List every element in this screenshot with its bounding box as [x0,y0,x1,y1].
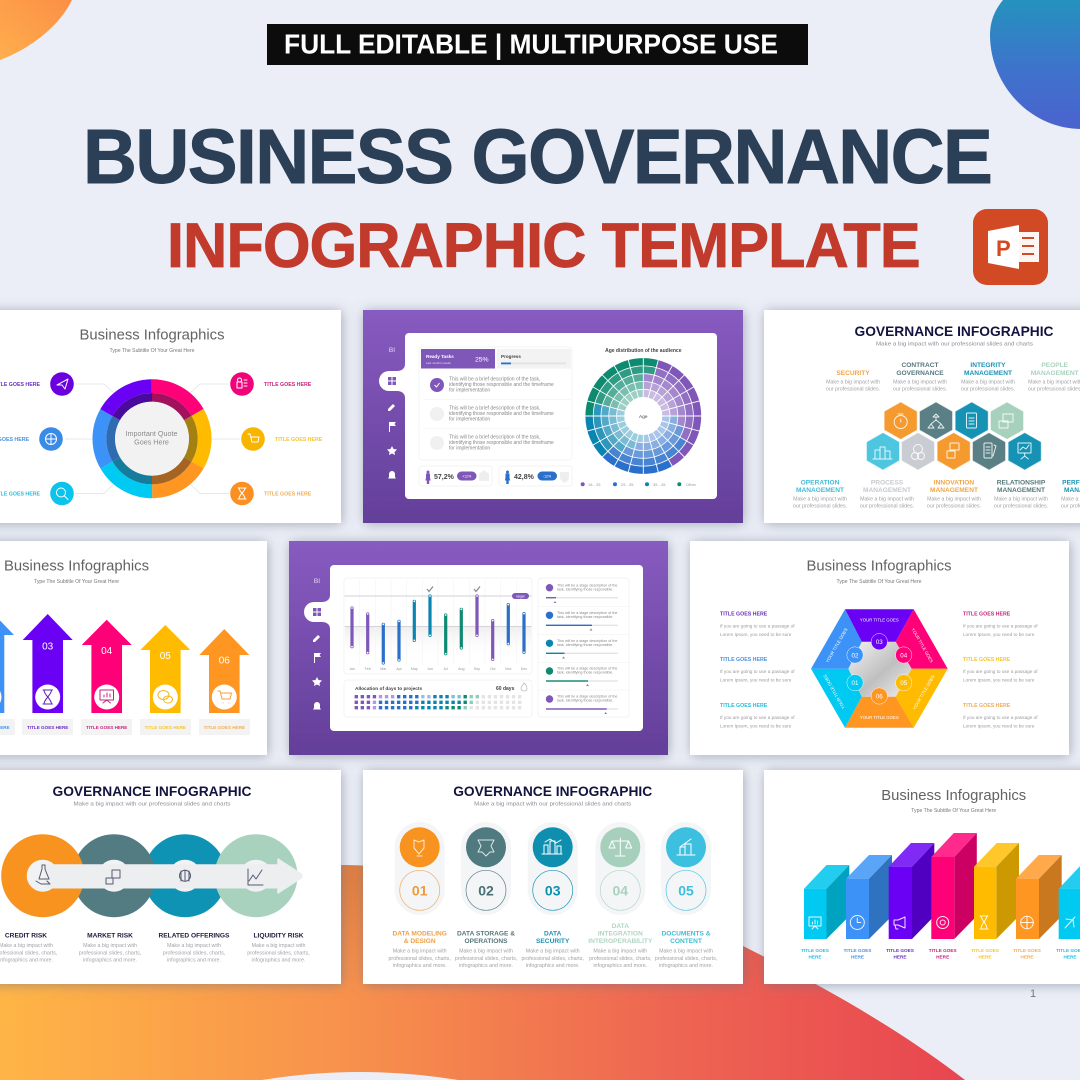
range chart card: Dec [521,667,527,671]
pill 01 [395,822,445,915]
bar labels: HERE [893,954,907,960]
panel: purple dashboard with age wheel [363,310,743,523]
left text blocks: If you are going to use a passage of [720,669,795,674]
3D bar chart [804,833,1080,939]
decoration: orange-red bottom wave [0,865,965,1080]
hexagon diagram: YOUR TITLE GOES [910,627,934,663]
right text blocks: Lorem Ipsum, you need to be sure [963,678,1035,682]
right text blocks: If you are going to use a passage of [963,624,1038,628]
top labels: CONTRACT [902,362,938,369]
chart legend: 25 - 35 [621,482,634,487]
hexagon diagram: 03 [876,639,883,646]
panel: 3D bars [764,770,1080,984]
hexagon diagram: YOUR TITLE GOES [822,674,846,710]
hexagon diagram: YOUR TITLE GOES [912,674,936,710]
pill descriptions: infographics and more. [393,963,447,969]
stage list card: This will be a stage description of the [557,695,617,699]
panel: purple dashboard with range chart [289,541,668,755]
risk descriptions: professional slides, charts, [79,950,141,956]
task list card: for implementation [449,446,490,452]
range chart card: target [516,594,525,598]
top labels: Make a big impact with [961,380,1015,386]
panel: arrows infographic [0,541,267,755]
task list card: Progress [501,354,521,359]
pill descriptions: Make a big impact with [659,948,713,954]
risk descriptions: infographics and more. [252,958,305,964]
banner [267,24,808,65]
task list card: for implementation [449,388,490,394]
arrow 03 [22,614,73,735]
task list card: Ready Tasks [426,354,454,359]
bottom labels: Make a big impact with [927,496,981,502]
left text blocks: Lorem Ipsum, you need to be sure [720,724,792,728]
bar labels: TITLE GOES [1013,948,1041,953]
hexagon diagram: 04 [900,652,908,659]
pill labels: CONTENT [670,938,702,945]
right text blocks: TITLE GOES HERE [963,612,1011,618]
pill descriptions: infographics and more. [659,963,713,969]
stage list card: task, identifying those responsible. [557,671,613,675]
connector lines [65,384,240,494]
center quote: Important Quote [126,429,177,438]
hexagon diagram: YOUR TITLE GOES [860,715,899,720]
heading: GOVERNANCE INFOGRAPHIC [52,783,252,799]
task list card: Last month's results [426,361,451,365]
bar labels: HERE [808,954,822,960]
bar labels: TITLE GOES [971,948,999,953]
pill 01: 01 [412,882,428,898]
hexagon diagram: YOUR TITLE GOES [860,618,899,622]
pill descriptions: Make a big impact with [526,948,580,954]
hexagon diagram [811,609,948,728]
pill labels: DATA [544,930,562,938]
center quote: Goes Here [134,438,169,446]
left text blocks: If you are going to use a passage of [720,715,795,720]
top labels: Make a big impact with [826,380,880,386]
sidebar: BI [389,347,395,354]
risk descriptions [0,943,310,964]
risk titles: RELATED OFFERINGS [159,932,230,940]
range chart card: Jul [443,667,448,671]
stage list card: This will be a stage description of the [557,667,617,671]
stat: 42,8% [499,466,572,486]
range chart card: Jun [427,667,433,671]
right text blocks: Lorem Ipsum, you need to be sure [963,724,1035,728]
stage list card: task, identifying those responsible. [557,643,613,647]
heading: Business Infographics [881,787,1026,804]
top labels: our professional slides. [826,386,880,392]
arrow 06: 06 [219,656,230,666]
arrow 02 [0,609,15,735]
labels: TITLE GOES HERE [264,491,312,497]
top labels: PEOPLE [1041,362,1069,369]
left text blocks: Lorem Ipsum, you need to be sure [720,632,792,637]
arrow 05: TITLE GOES HERE [145,725,186,730]
task list card: identifying those responsible and the timeframe [449,411,554,417]
decoration: blue blurred circle [990,0,1080,129]
range chart card: Jan [349,667,355,671]
risk descriptions: Make a big impact with [167,943,221,949]
pill labels: SECURITY [536,938,570,945]
risk descriptions: infographics and more. [167,958,221,964]
overlapping rings [1,834,297,917]
allocation card [344,680,532,717]
bar labels: HERE [1020,954,1034,960]
stat: 57,2% [419,466,492,486]
right text blocks: Lorem Ipsum, you need to be sure [963,632,1035,637]
range chart card: Nov [505,667,512,671]
arrow 04: TITLE GOES HERE [86,725,127,730]
chart legend: Other [686,482,697,487]
subheading: Make a big impact with our professional slides and charts [876,342,1033,348]
subheading: Type The Subtitle Of Your Great Here [110,348,195,354]
range chart card: Feb [365,667,371,671]
range chart card: Aug [458,667,465,671]
panel: donut infographic [0,310,341,523]
left text blocks: TITLE GOES HERE [720,657,768,663]
stage list card [538,578,629,717]
bar labels: HERE [936,954,949,960]
pill labels: DOCUMENTS & [661,930,711,938]
arrow 03: 03 [42,642,54,652]
risk titles: LIQUIDITY RISK [253,932,304,940]
risk descriptions: professional slides, charts, [247,950,310,956]
labels [0,382,323,497]
sidebar [379,347,405,478]
pill labels: INTEGRATION [598,930,643,938]
task list card: This will be a brief description of the task, [449,434,540,440]
right text blocks: If you are going to use a passage of [963,715,1038,720]
icon circles [39,372,265,505]
range chart card: Apr [396,667,403,671]
risk icons [36,865,263,885]
pill 03: 03 [545,882,561,898]
labels: TITLE GOES HERE [275,437,323,443]
arrow 05 [140,625,191,735]
top labels: our professional slides. [961,386,1015,392]
bottom labels: INNOVATION [934,480,974,486]
pill descriptions: Make a big impact with [459,948,513,954]
pill 04: 04 [613,882,628,898]
pill descriptions: infographics and more. [459,963,513,969]
stat: 42,8%: 42,8% [514,474,535,481]
pill 03 [528,822,578,915]
labels: TITLE GOES HERE [264,382,312,388]
task list card: identifying those responsible and the timeframe [449,382,554,388]
pill labels: & DESIGN [404,938,436,945]
task list card: for implementation [449,416,490,422]
hexagon diagram: 05 [900,680,908,687]
pill 02 [461,822,511,915]
hexagon diagram: 02 [852,652,859,659]
pill labels: DATA MODELING [392,930,447,938]
stat: 42,8%: -12% [543,474,551,478]
decoration: orange corner shape [0,0,72,60]
bottom labels: MANAGEMENT [796,487,844,494]
banner: FULL EDITABLE | MULTIPURPOSE USE [284,29,778,60]
donut chart [99,386,205,491]
stage list card: This will be a stage description of the [557,611,617,615]
stage list card: This will be a stage description of the [557,639,617,643]
bottom labels: our professional slides. [860,504,914,510]
range chart card: Oct [490,667,495,671]
hexagon diagram: 01 [852,680,859,687]
task list card: This will be a brief description of the task, [449,406,540,412]
stat: 57,2%: +12% [462,474,471,478]
subheading: Type The Subtitle Of Your Great Here [836,579,922,585]
pill descriptions: professional slides, charts, [521,956,584,962]
bottom labels: RELATIONSHIP [997,480,1046,486]
risk descriptions: Make a big impact with [83,943,137,949]
range chart card: May [411,667,418,671]
hexagon diagram: 06 [876,693,883,700]
top labels: MANAGEMENT [964,370,1012,377]
pill descriptions: professional slides, charts, [455,956,517,962]
sidebar [304,578,330,710]
top labels [826,362,1080,392]
pill descriptions: professional slides, charts, [655,956,717,962]
risk descriptions: infographics and more. [0,958,53,964]
bar labels: TITLE GOES [886,948,914,953]
pill descriptions: Make a big impact with [593,948,647,954]
top labels: Make a big impact with [893,380,947,386]
center quote [126,429,177,446]
bar labels: HERE [1063,954,1077,960]
stat: 57,2%: 57,2% [434,474,455,481]
bottom labels [793,480,1080,510]
panel: numbered data pills [363,770,743,984]
pill labels: OPERATIONS [464,938,508,945]
chart legend [581,482,697,487]
bottom labels: MANAGEMENT [997,487,1045,494]
task list card: identifying those responsible and the timeframe [449,440,554,446]
left text blocks [720,612,795,728]
heading: GOVERNANCE INFOGRAPHIC [453,783,652,799]
subtitle: infographic template: INFOGRAPHIC TEMPLATE [167,211,921,281]
bottom labels: Make a big impact with [994,496,1048,502]
pill descriptions: Make a big impact with [393,948,447,954]
bar labels: HERE [978,954,992,960]
heading: GOVERNANCE INFOGRAPHIC [854,323,1054,339]
left text blocks: If you are going to use a passage of [720,624,795,628]
allocation card: 60 days [496,686,515,692]
stage list card: task, identifying those responsible. [557,615,613,619]
right text blocks: TITLE GOES HERE [963,703,1011,709]
risk descriptions: Make a big impact with [0,943,53,949]
radial age chart: Age [639,414,648,420]
risk titles: CREDIT RISK [5,932,47,940]
top labels: INTEGRITY [970,362,1006,369]
chart heading: Age distribution of the audience [605,348,682,354]
heading: Business Infographics [80,326,224,344]
task list card: This will be a brief description of the task, [449,376,540,382]
arrow 03: TITLE GOES HERE [27,725,68,730]
arrow 04: 04 [101,646,113,657]
bottom labels: our professional slides. [927,504,981,510]
allocation card: Allocation of days to projects [355,686,422,692]
top labels: MANAGEMENT [1031,370,1079,377]
pill labels: DATA STORAGE & [457,930,515,938]
range chart card [344,578,532,674]
panel: risk circles [0,770,341,984]
right text blocks [963,612,1038,728]
radial age chart [584,357,702,475]
task list card [419,347,572,460]
top labels: GOVERNANCE [896,370,944,377]
chart legend: 18 - 25 [588,482,601,487]
pill 05: 05 [678,882,694,898]
pill 05 [661,822,711,915]
pill labels: DATA [612,923,629,930]
risk titles [5,932,304,940]
bottom labels: MANAGEMENT [930,487,978,494]
hexagon cluster [866,402,1041,470]
bottom labels: our professional slides. [793,504,847,510]
panel: hexagon wheel infographic [690,541,1069,755]
bar labels: TITLE GOES [844,948,871,953]
risk descriptions: Make a big impact with [252,943,305,949]
risk titles: MARKET RISK [87,932,133,940]
range chart card: Sep [474,667,480,671]
left text blocks: TITLE GOES HERE [720,612,768,618]
subheading: Type The Subtitle Of Your Great Here [34,579,119,585]
pill descriptions: infographics and more. [593,963,647,969]
pill labels [392,923,711,945]
left text blocks: Lorem Ipsum, you need to be sure [720,678,792,682]
subheading: Make a big impact with our professional slides and charts [474,802,631,808]
range chart card: Mar [380,667,387,671]
heading: Business Infographics [4,558,149,574]
pill descriptions [388,948,717,969]
subheading: Make a big impact with our professional slides and charts [74,802,231,808]
bottom labels: Make a big impact with [793,496,847,502]
risk descriptions: professional slides, charts, [163,950,225,956]
icon: powerpoint [973,209,1048,285]
task list card: 25% [475,356,489,364]
bar labels: HERE [851,954,864,960]
bottom labels: MANAGEMENT [863,487,911,494]
top labels: our professional slides. [893,386,947,392]
stage list card: task, identifying those responsible. [557,699,613,703]
bottom labels: OPERATION [801,480,840,486]
arrow 04 [81,620,132,735]
arrow 06 [199,629,250,735]
pill descriptions: professional slides, charts, [589,956,652,962]
chart legend: 35 - 45 [653,482,666,487]
hexagon diagram: YOUR TITLE GOES [825,627,849,663]
right text blocks: TITLE GOES HERE [963,657,1011,663]
page number: 1 [1030,988,1036,1000]
sidebar: BI [314,578,320,585]
arrow 05: 05 [160,651,171,662]
pill 04 [595,822,645,915]
pill labels: INTEROPERABILITY [588,938,653,945]
left text blocks: TITLE GOES HERE [720,703,768,709]
bottom labels: Make a big impact with [860,496,914,502]
heading: Business Infographics [806,558,952,574]
pill descriptions: infographics and more. [526,963,580,969]
bar labels: TITLE GOES [929,948,957,953]
title: business governance: BUSINESS GOVERNANCE [83,114,993,200]
bottom labels: PROCESS [871,480,904,486]
bar labels [801,948,1080,960]
arrow band [45,859,302,893]
stage list card: task, identifying those responsible. [557,588,613,592]
subheading: Type The Subtitle Of Your Great Here [911,808,996,814]
pill descriptions: professional slides, charts, [388,956,451,962]
bar labels: TITLE GOES [801,948,829,953]
stage list card: This will be a stage description of the [557,584,617,588]
panel: governance hexagons [764,310,1080,523]
pill 02: 02 [478,882,494,898]
bottom labels: our professional slides. [994,504,1048,510]
icon: powerpoint: P [996,236,1011,261]
arrow 06: TITLE GOES HERE [204,725,245,730]
risk descriptions: infographics and more. [83,958,137,964]
top labels: SECURITY [836,370,870,377]
right text blocks: If you are going to use a passage of [963,669,1038,674]
